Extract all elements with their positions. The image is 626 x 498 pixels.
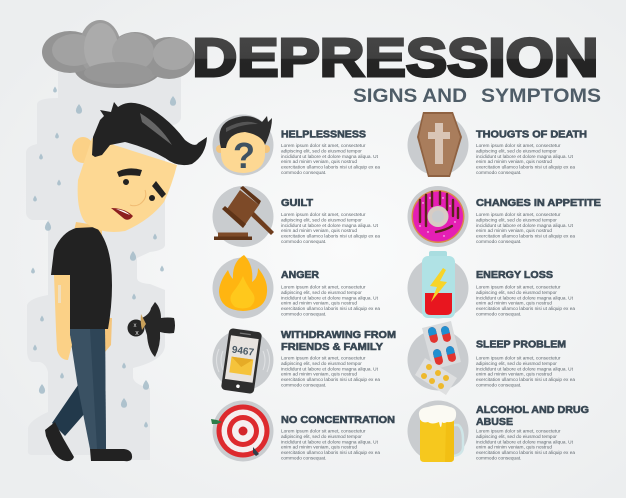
body text: Lorem ipsum dolor sit amet, consectetur xyxy=(476,143,561,149)
body text: enim ad minim veniam, quis nostrud xyxy=(476,372,552,378)
panel: thoughts of death xyxy=(408,112,587,177)
body text: commodo consequat. xyxy=(476,456,521,462)
body text: commodo consequat. xyxy=(281,239,326,245)
hair xyxy=(92,102,207,165)
body text: Lorem ipsum dolor sit amet, consectetur xyxy=(281,284,366,290)
icon: battery xyxy=(408,251,468,318)
ear xyxy=(72,137,94,163)
title: DEPRESSION xyxy=(192,28,598,88)
body text: commodo consequat. xyxy=(281,312,326,318)
body text: commodo consequat. xyxy=(281,170,326,176)
body text: exercitation ullamco laboris nisi ut aliquip ex ea xyxy=(476,234,575,240)
back leg xyxy=(52,380,86,436)
heading: ENERGY LOSS xyxy=(476,269,553,281)
body text: enim ad minim veniam, quis nostrud xyxy=(476,159,552,165)
icon: dead crow: x xyxy=(134,323,136,329)
body text: commodo consequat. xyxy=(281,382,326,388)
rain backdrop xyxy=(26,72,181,460)
body text: exercitation ullamco laboris nisi ut aliquip ex ea xyxy=(281,450,380,456)
heading: CHANGES IN APPETITE xyxy=(476,197,601,209)
panel: sleep problem xyxy=(408,321,575,395)
panel: alcohol and drug abuse xyxy=(408,400,589,462)
icon: flame xyxy=(212,255,274,318)
body text: enim ad minim veniam, quis nostrud xyxy=(281,372,357,378)
body text: incididunt ut labore et dolore magna aliqua. Ut xyxy=(476,295,574,301)
body text: incididunt ut labore et dolore magna aliqua. Ut xyxy=(476,223,574,229)
panel: guilt xyxy=(212,186,380,247)
body text: incididunt ut labore et dolore magna aliqua. Ut xyxy=(476,154,574,160)
nose xyxy=(130,190,146,206)
body text: exercitation ullamco laboris nisi ut aliquip ex ea xyxy=(281,306,380,312)
subtitle: SYMPTOMS xyxy=(481,85,601,107)
body text: adipiscing elit, sed do eiusmod tempor xyxy=(476,434,557,440)
front leg xyxy=(69,329,106,449)
body text: adipiscing elit, sed do eiusmod tempor xyxy=(476,290,557,296)
body text: exercitation ullamco laboris nisi ut aliquip ex ea xyxy=(281,234,380,240)
body text: adipiscing elit, sed do eiusmod tempor xyxy=(476,148,557,154)
cloud xyxy=(42,20,195,88)
neck xyxy=(72,222,102,240)
face xyxy=(78,138,177,232)
body text: enim ad minim veniam, quis nostrud xyxy=(476,301,552,307)
body text: commodo consequat. xyxy=(476,239,521,245)
torso xyxy=(51,227,112,329)
body text: adipiscing elit, sed do eiusmod tempor xyxy=(281,148,362,154)
body text: adipiscing elit, sed do eiusmod tempor xyxy=(281,434,362,440)
icon: head with question mark xyxy=(212,114,274,176)
icon: gavel xyxy=(212,186,274,247)
heading: ANGER xyxy=(281,269,319,281)
panel: withdrawing xyxy=(212,328,396,394)
heading: NO CONCENTRATION xyxy=(281,414,395,426)
icon: beer mug xyxy=(408,400,468,462)
body text: commodo consequat. xyxy=(476,170,521,176)
body text: Lorem ipsum dolor sit amet, consectetur xyxy=(281,428,366,434)
body text: enim ad minim veniam, quis nostrud xyxy=(476,228,552,234)
body text: exercitation ullamco laboris nisi ut aliquip ex ea xyxy=(476,306,575,312)
panel: anger xyxy=(212,255,380,318)
body text: enim ad minim veniam, quis nostrud xyxy=(281,159,357,165)
body text: exercitation ullamco laboris nisi ut aliquip ex ea xyxy=(476,450,575,456)
body text: Lorem ipsum dolor sit amet, consectetur xyxy=(281,212,366,218)
body text: enim ad minim veniam, quis nostrud xyxy=(281,445,357,451)
body text: commodo consequat. xyxy=(476,382,521,388)
heading: HELPLESSNESS xyxy=(281,128,366,140)
body text: Lorem ipsum dolor sit amet, consectetur xyxy=(281,356,366,362)
body text: Lorem ipsum dolor sit amet, consectetur xyxy=(476,428,561,434)
eyebrows xyxy=(117,168,142,177)
icon: pills xyxy=(408,321,468,395)
icon: dead crow xyxy=(128,302,175,357)
panel: helplessness xyxy=(212,114,380,176)
body text: commodo consequat. xyxy=(476,312,521,318)
icon: target xyxy=(211,400,274,462)
body text: adipiscing elit, sed do eiusmod tempor xyxy=(476,361,557,367)
shoes xyxy=(90,449,132,461)
mouth xyxy=(111,208,133,220)
body text: Lorem ipsum dolor sit amet, consectetur xyxy=(476,356,561,362)
front arm xyxy=(54,275,72,360)
heading: THOUGTS OF DEATH xyxy=(476,128,587,140)
panel: no concentration xyxy=(211,400,395,462)
body text: enim ad minim veniam, quis nostrud xyxy=(476,445,552,451)
heading line 2: ABUSE xyxy=(476,416,513,428)
body text: adipiscing elit, sed do eiusmod tempor xyxy=(281,217,362,223)
body text: incididunt ut labore et dolore magna aliqua. Ut xyxy=(476,439,574,445)
icon: phone: 9467 xyxy=(231,345,255,359)
body text: incididunt ut labore et dolore magna aliqua. Ut xyxy=(281,439,379,445)
panel: energy loss xyxy=(408,251,575,318)
body text: exercitation ullamco laboris nisi ut aliquip ex ea xyxy=(476,165,575,171)
eyes xyxy=(123,179,129,185)
body text: exercitation ullamco laboris nisi ut aliquip ex ea xyxy=(281,165,380,171)
heading: WITHDRAWING FROM xyxy=(281,329,396,341)
body text: Lorem ipsum dolor sit amet, consectetur xyxy=(476,212,561,218)
body text: incididunt ut labore et dolore magna aliqua. Ut xyxy=(281,366,379,372)
body text: Lorem ipsum dolor sit amet, consectetur xyxy=(476,284,561,290)
body text: enim ad minim veniam, quis nostrud xyxy=(281,228,357,234)
heading: SLEEP PROBLEM xyxy=(476,338,566,350)
icon: donut xyxy=(408,186,468,247)
body text: adipiscing elit, sed do eiusmod tempor xyxy=(281,361,362,367)
body text: incididunt ut labore et dolore magna aliqua. Ut xyxy=(281,223,379,229)
panel: changes in appetite xyxy=(408,186,601,247)
body text: enim ad minim veniam, quis nostrud xyxy=(281,301,357,307)
icon: coffin xyxy=(408,112,468,177)
heading line 2: FRIENDS & FAMILY xyxy=(281,341,383,353)
back arm xyxy=(104,318,112,352)
body text: incididunt ut labore et dolore magna aliqua. Ut xyxy=(281,154,379,160)
body text: adipiscing elit, sed do eiusmod tempor xyxy=(476,217,557,223)
icon: phone xyxy=(212,328,274,394)
icon: dead crow: x xyxy=(135,330,139,337)
body text: Lorem ipsum dolor sit amet, consectetur xyxy=(281,143,366,149)
body text: incididunt ut labore et dolore magna aliqua. Ut xyxy=(476,366,574,372)
heading: ALCOHOL AND DRUG xyxy=(476,404,589,416)
heading: GUILT xyxy=(281,197,314,209)
body text: adipiscing elit, sed do eiusmod tempor xyxy=(281,290,362,296)
subtitle xyxy=(353,85,601,107)
icon: head with question mark: ? xyxy=(233,135,255,176)
character: sad man xyxy=(45,102,207,461)
rain drops xyxy=(31,86,176,427)
subtitle: SIGNS AND xyxy=(353,85,467,107)
body text: incididunt ut labore et dolore magna aliqua. Ut xyxy=(281,295,379,301)
body text: exercitation ullamco laboris nisi ut aliquip ex ea xyxy=(281,377,380,383)
body text: exercitation ullamco laboris nisi ut aliquip ex ea xyxy=(476,377,575,383)
body text: commodo consequat. xyxy=(281,456,326,462)
